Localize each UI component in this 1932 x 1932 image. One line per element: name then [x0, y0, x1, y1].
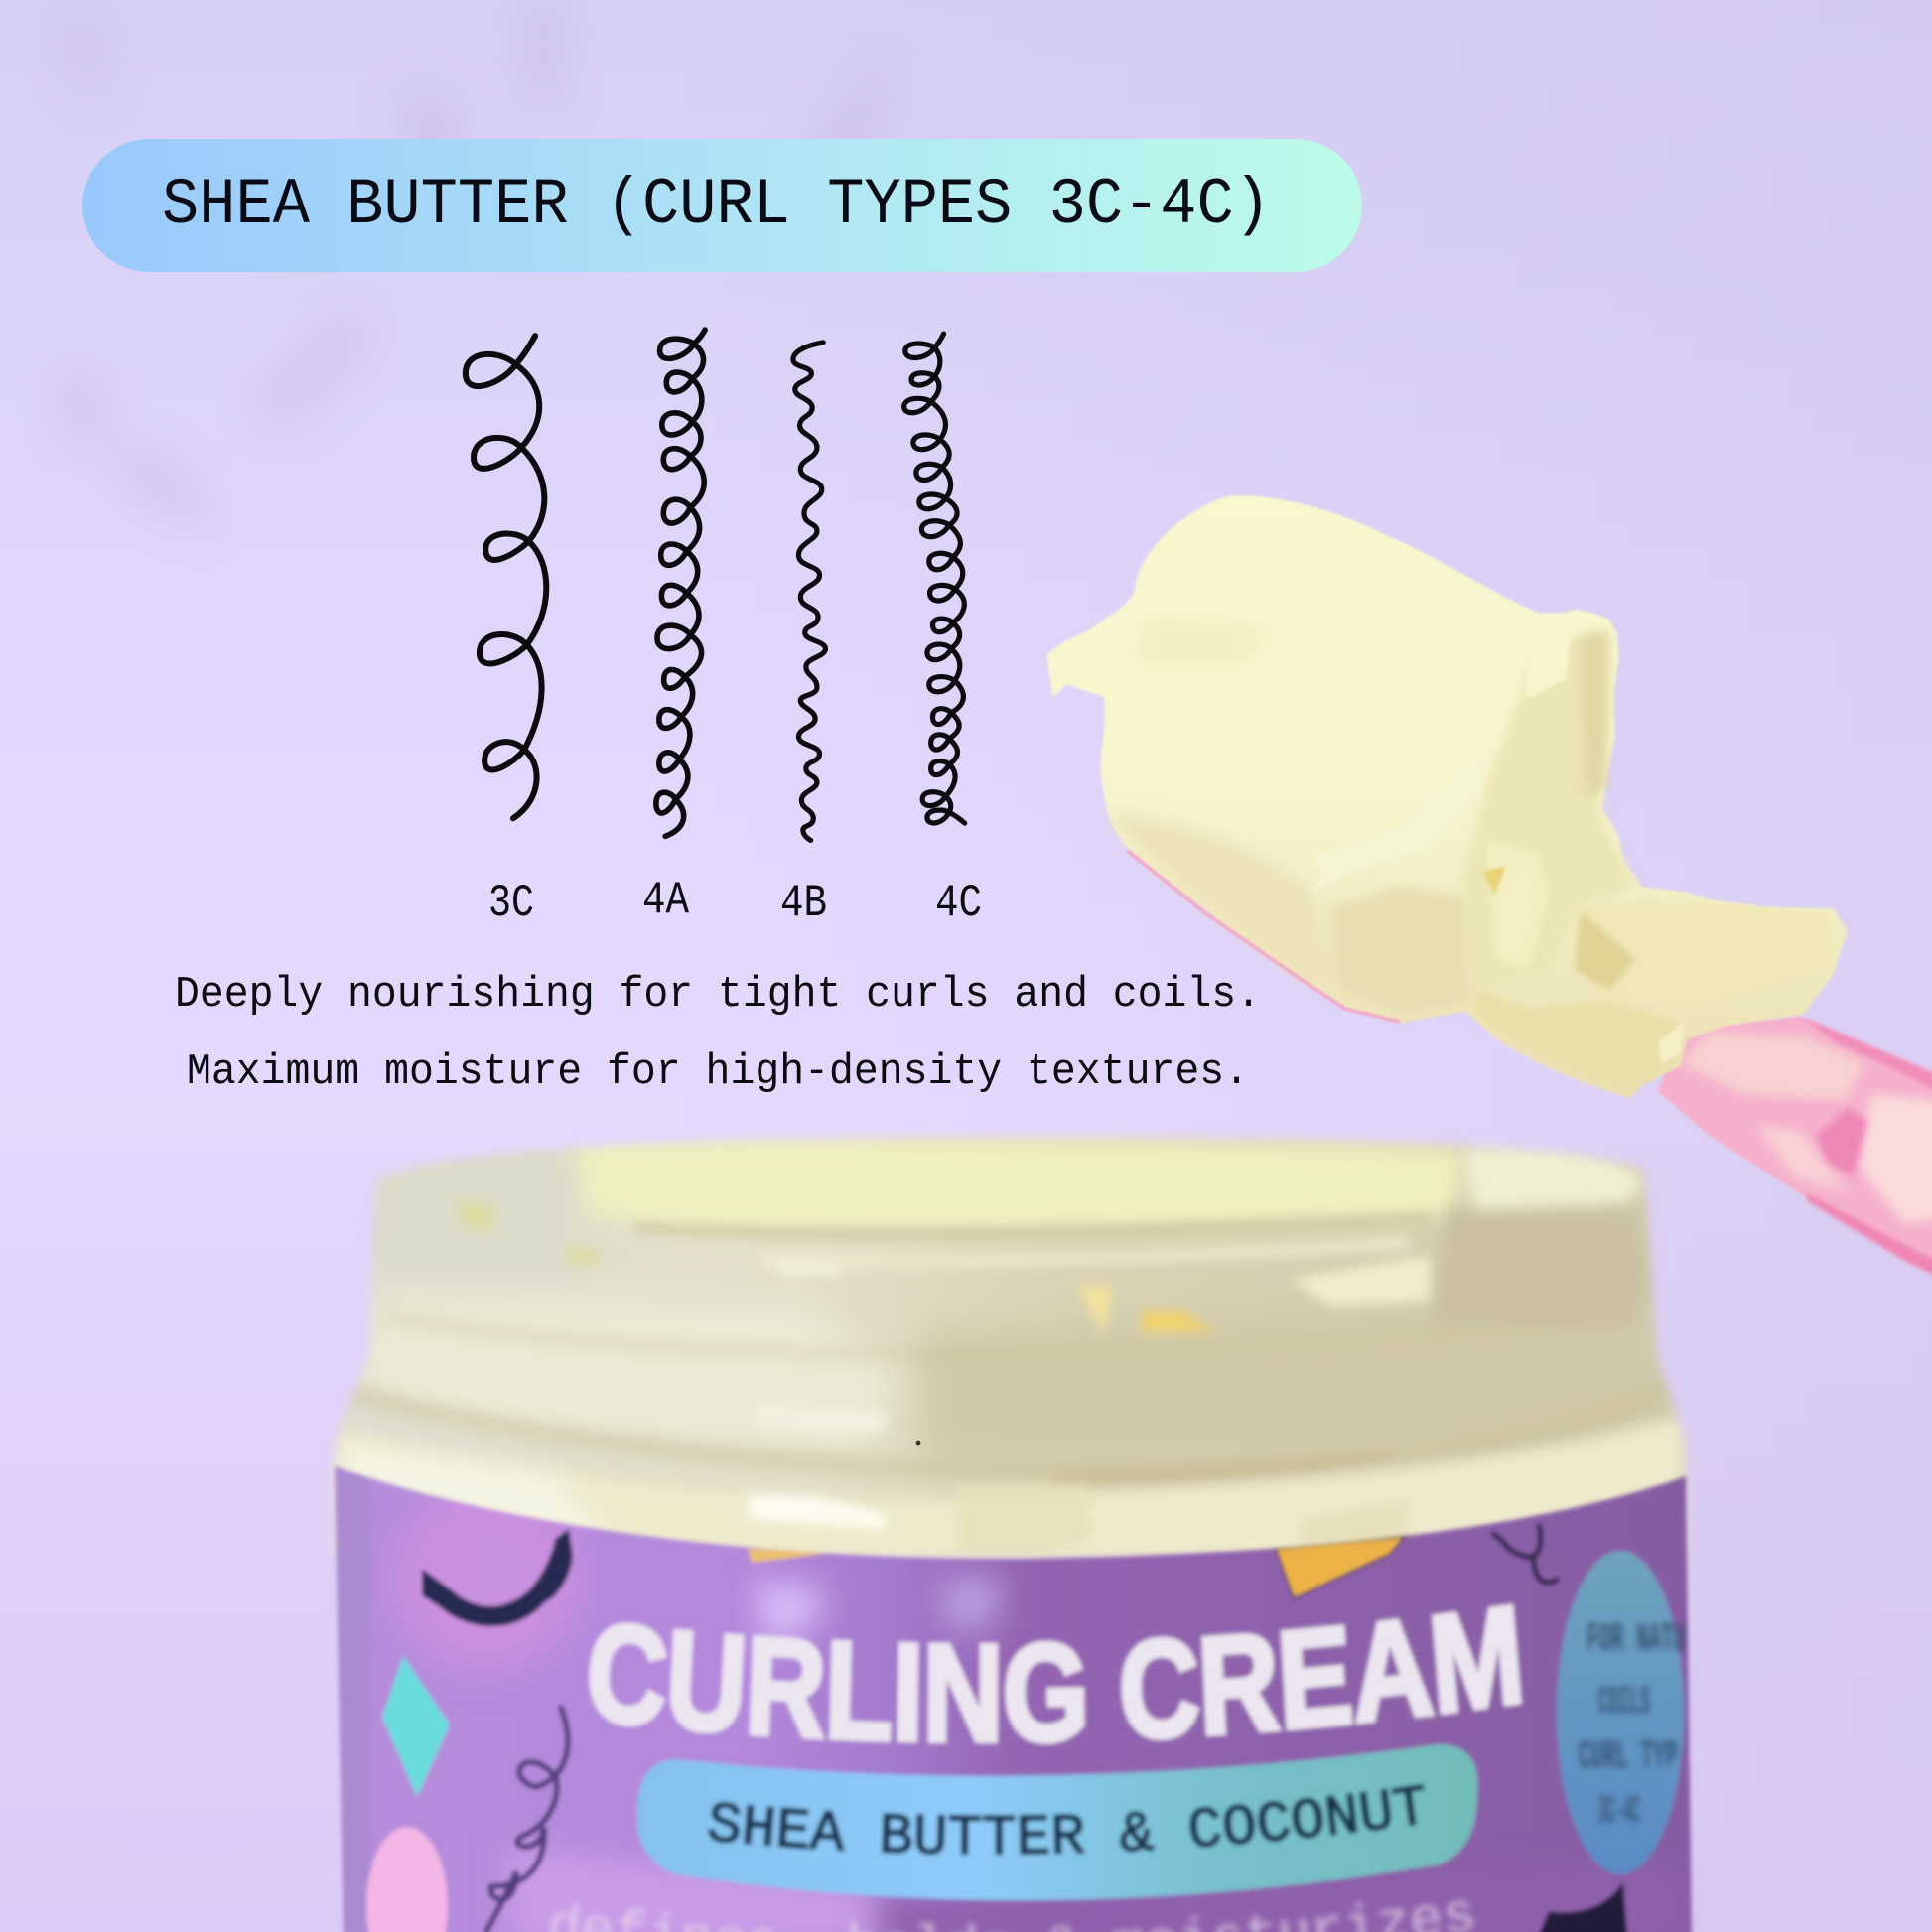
yellow triangle [1276, 1537, 1405, 1598]
thin curl [486, 1708, 568, 1932]
oval text: FOR NATU [1587, 1618, 1686, 1663]
curl type labels [488, 875, 982, 929]
line one: Deeply nourishing for tight curls and coils. [175, 970, 1261, 1020]
label 4C: 4C [935, 878, 982, 929]
jar [330, 1132, 1695, 1932]
glass neck and threads [328, 1127, 1698, 1564]
dark crescent [422, 1529, 573, 1626]
upper cream fold [1526, 613, 1572, 700]
oval text: CURL TYP [1579, 1735, 1678, 1780]
description text [175, 970, 1261, 1097]
line two: Maximum moisture for high-density textures. [187, 1047, 1249, 1097]
title pill [82, 139, 1362, 272]
cream mass [1046, 495, 1848, 1098]
cream shading [1107, 613, 1833, 1089]
jar speck [916, 1441, 920, 1445]
product name: CURLING CREAM [586, 1600, 1525, 1747]
curl 4B [793, 343, 825, 840]
curl type diagrams [466, 330, 965, 840]
small yellow triangle [748, 1549, 839, 1563]
curl type oval [1557, 1551, 1684, 1874]
spatula with shea butter [1046, 495, 1932, 1292]
teal diamond [382, 1656, 450, 1797]
curl 3C [466, 336, 546, 818]
lower cream dab [1658, 1022, 1684, 1063]
label 3C: 3C [488, 878, 534, 929]
small top curl [1491, 1524, 1559, 1583]
scent band [637, 1744, 1477, 1900]
label 4A: 4A [642, 875, 689, 926]
oval text: COILS [1598, 1681, 1650, 1725]
curl 4C [904, 334, 965, 823]
oval text: 3C-4C [1598, 1790, 1640, 1835]
label patches [392, 1484, 1688, 1932]
curl 4A [656, 330, 705, 836]
pink oval [366, 1827, 448, 1932]
dark lower swirl [1534, 1881, 1628, 1932]
label 4B: 4B [780, 878, 827, 929]
pink spatula edge [1127, 851, 1400, 1022]
scent text: SHEA BUTTER & COCONUT [706, 1781, 1426, 1858]
oval text [1579, 1618, 1686, 1835]
pink spatula handle [1658, 1017, 1932, 1292]
cream highlight petal [1313, 755, 1489, 890]
jar label [332, 1464, 1695, 1932]
title text: SHEA BUTTER (CURL TYPES 3C-4C) [162, 168, 1271, 242]
